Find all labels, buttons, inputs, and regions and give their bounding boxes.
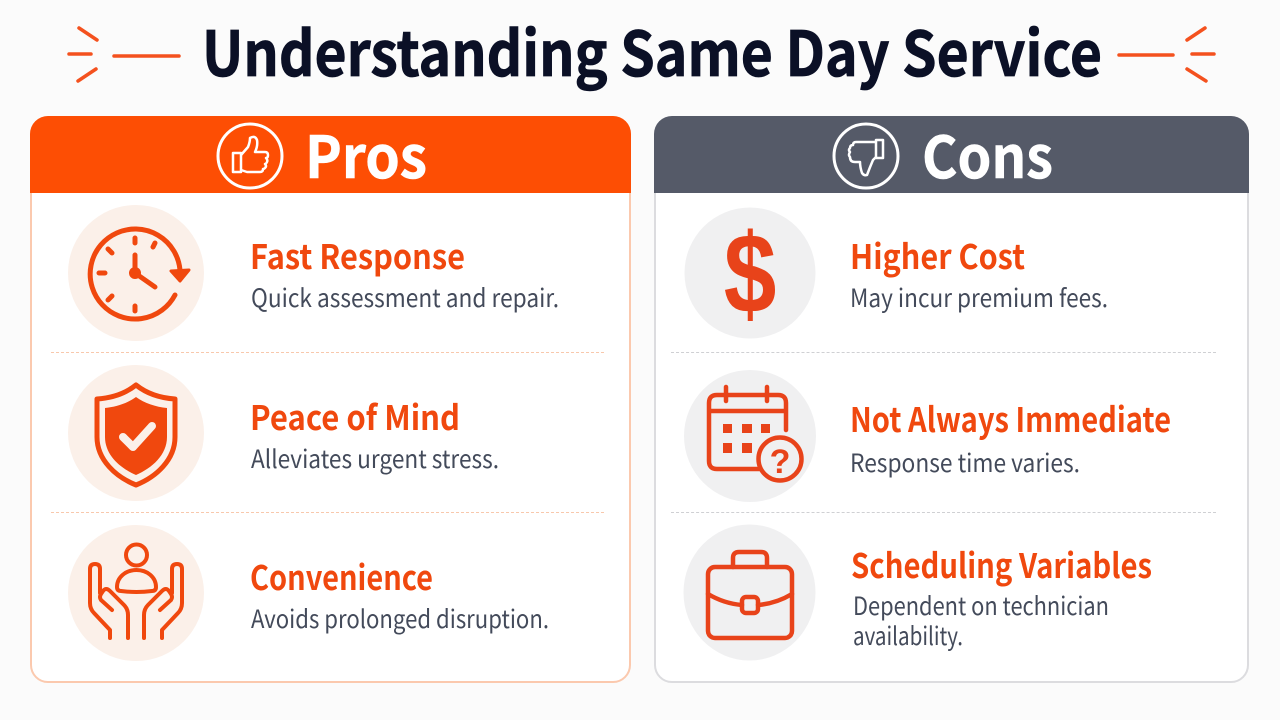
icon: briefcase (684, 524, 816, 660)
panel: cons (654, 116, 1249, 683)
icon: hands and person (68, 525, 204, 661)
divider (671, 352, 1216, 353)
description: Alleviates urgent stress. (251, 440, 499, 476)
description: Quick assessment and repair. (251, 279, 559, 315)
icon: left title accent (67, 26, 181, 83)
cons heading: Cons (922, 111, 1053, 195)
heading: Higher Cost (850, 230, 1025, 279)
item: peace of mind (68, 365, 499, 501)
item: higher cost (684, 208, 1108, 338)
icon: calendar with question mark: ? (770, 443, 790, 481)
description: Dependent on technician (853, 587, 1109, 623)
heading: Fast Response (250, 230, 465, 279)
panel body outline (654, 116, 1249, 683)
icon: clock (68, 205, 204, 341)
description: May incur premium fees. (850, 279, 1108, 315)
description: Avoids prolonged disruption. (251, 600, 549, 636)
icon: dollar sign: $ (724, 212, 776, 337)
item: not always immediate (684, 370, 1171, 502)
pros heading: Pros (305, 111, 427, 195)
icon: dollar sign (684, 208, 816, 338)
cons header (654, 116, 1249, 193)
title: Understanding Same Day Service (202, 4, 1102, 94)
divider (671, 512, 1216, 513)
heading: Not Always Immediate (850, 393, 1171, 442)
heading: Peace of Mind (250, 391, 460, 440)
icon: thumbs down (832, 122, 900, 190)
divider (51, 352, 604, 353)
icon: thumbs up (216, 122, 284, 190)
item: convenience (68, 525, 549, 661)
icon: calendar with question mark (684, 370, 816, 502)
description (853, 587, 1109, 653)
divider (51, 512, 604, 513)
panel body outline (30, 116, 631, 683)
description: availability. (853, 617, 963, 653)
heading: Scheduling Variables (851, 539, 1152, 588)
item: scheduling variables (684, 524, 1152, 660)
icon: shield (68, 365, 204, 501)
icon: right title accent (1117, 26, 1216, 83)
pros header (30, 116, 631, 193)
description: Response time varies. (850, 444, 1080, 480)
panel: pros (30, 116, 631, 683)
item: fast response (68, 205, 559, 341)
heading: Convenience (250, 551, 433, 600)
